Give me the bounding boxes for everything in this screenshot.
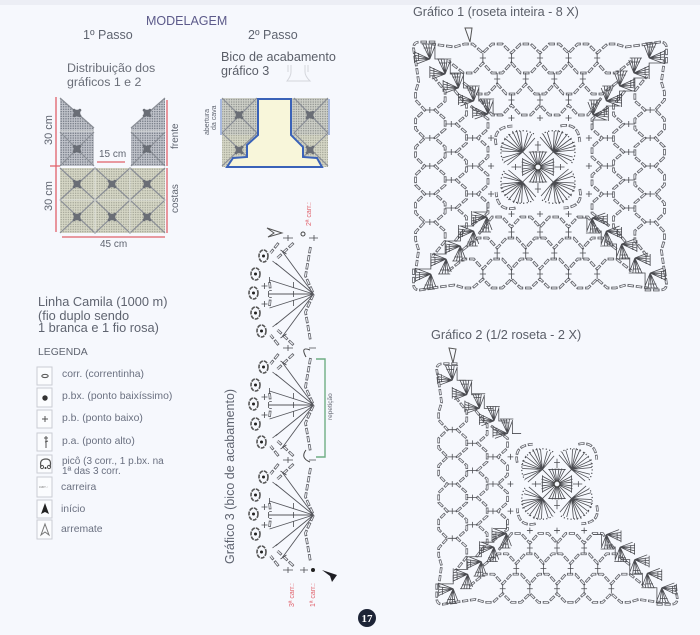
chart 3 repeats (249, 232, 318, 573)
legend row: p.b (37, 410, 143, 428)
chart 3: finishing edge (223, 202, 337, 607)
legend row: carreira (37, 477, 96, 497)
legend row: p.bx (37, 388, 172, 407)
text: distribution of charts: gráficos 1 e 2 (67, 75, 141, 89)
chart 1: full rosette (414, 42, 666, 290)
label: abertura da cava: abertura (204, 109, 211, 135)
arrow: start outline (267, 228, 282, 237)
right front strap (131, 98, 165, 166)
label: costas: costas (170, 184, 181, 213)
label: frente: frente (170, 123, 181, 149)
label: 30 cm upper: 30 cm (43, 115, 55, 145)
label: row 1: 1ª carr.: (310, 583, 317, 607)
legend row: p.b: p.b. (ponto baixo) (62, 413, 143, 424)
label: 30 cm lower: 30 cm (43, 181, 55, 211)
legend row: corr: corr. (correntinha) (62, 369, 144, 380)
text: finishing edge: gráfico 3 (221, 64, 269, 78)
page number: 17 (362, 613, 373, 625)
heading: step 1: 1º Passo (83, 28, 133, 42)
chart 2: half rosette (437, 364, 677, 604)
legend row: arremate: arremate (61, 524, 103, 535)
legend row: p.a (37, 433, 135, 451)
icon: small garment outline (287, 65, 310, 81)
label: repetição: repetição (327, 393, 334, 420)
label: row 2: 2ª carr.: (306, 202, 313, 226)
title: chart 1: Gráfico 1 (roseta inteira - 8 X) (413, 5, 579, 19)
label: row 3: 3ª carr.: (289, 583, 296, 607)
legend row: início (37, 500, 85, 518)
title: chart 2: Gráfico 2 (1/2 roseta - 2 X) (431, 328, 581, 342)
text: yarn: (fio duplo sendo (38, 308, 129, 323)
label: 15 cm: 15 cm (99, 149, 126, 160)
legend (37, 347, 172, 539)
back panel (60, 168, 165, 233)
label: 45 cm: 45 cm (100, 239, 127, 250)
legend row: picô: 1ª das 3 corr. (62, 466, 121, 477)
neckline opening (227, 99, 322, 167)
left front strap (60, 98, 94, 166)
legend title: LEGENDA (38, 347, 88, 358)
text: finishing edge: Bico de acabamento (221, 50, 336, 64)
arrow: start solid (322, 570, 337, 582)
page number (358, 609, 376, 627)
legend row: p.bx: p.bx. (ponto baixíssimo) (62, 391, 172, 402)
legend row: picô (37, 455, 164, 477)
arrow: chart 1 start (465, 28, 472, 42)
label: abertura da cava: da cava (211, 105, 218, 130)
text: yarn: 1 branca e 1 fio rosa) (38, 320, 159, 335)
title: modelagem: MODELAGEM (146, 14, 227, 28)
heading: step 2: 2º Passo (248, 28, 298, 42)
legend row: carreira: carr.: (39, 484, 48, 489)
text: yarn: Linha Camila (1000 m) (38, 294, 167, 309)
bracket: repeat (316, 359, 325, 457)
diagram: step 2 neckline (204, 98, 329, 167)
legend row: corr (37, 367, 144, 385)
title: chart 3: Gráfico 3 (bico de acabamento) (223, 389, 237, 564)
legend row: picô: picô (3 corr., 1 p.bx. na (62, 456, 164, 467)
diagram: step 1 garment layout (43, 97, 181, 250)
text: distribution of charts: Distribuição dos (67, 61, 155, 75)
legend row: p.a: p.a. (ponto alto) (62, 436, 135, 447)
legend row: carreira: carreira (61, 482, 96, 493)
legend row: início: início (61, 504, 85, 515)
legend row: arremate (37, 520, 103, 539)
arrow: chart 2 start (449, 348, 456, 363)
